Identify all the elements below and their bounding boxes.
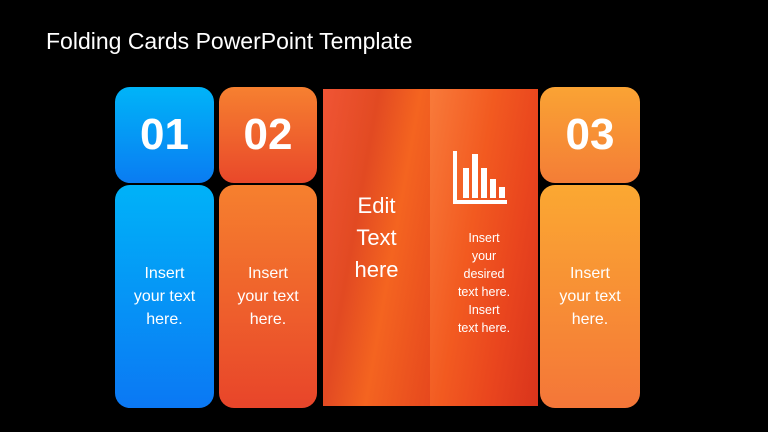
card 01 body: here. xyxy=(146,311,183,328)
text block: desired xyxy=(464,267,504,281)
icon: bar chart xyxy=(453,151,507,204)
card 02 body: your text xyxy=(237,288,299,305)
text block: Insert xyxy=(468,303,500,317)
text block: Insert xyxy=(468,231,500,245)
text block: text here. xyxy=(458,285,510,299)
card 03 top: 03 xyxy=(566,110,614,159)
folded panel left: here xyxy=(354,256,399,282)
card 01 top: 01 xyxy=(140,110,189,159)
card 03 top xyxy=(540,87,640,183)
card 01 body: your text xyxy=(134,288,195,305)
card 03 body: here. xyxy=(572,311,608,328)
card 03 body: your text xyxy=(559,288,621,305)
text block: your xyxy=(472,249,496,263)
text block xyxy=(458,231,510,335)
folded panel left: Edit xyxy=(358,192,395,218)
card 02 top xyxy=(219,87,317,183)
text block: text here. xyxy=(458,321,510,335)
card 02 body xyxy=(219,185,317,408)
folded panel left xyxy=(323,89,430,406)
card 02 top: 02 xyxy=(244,110,292,159)
card 01 body xyxy=(115,185,214,408)
folded panel right xyxy=(430,89,538,406)
card 02 body: here. xyxy=(250,311,286,328)
folded panel left: Text xyxy=(356,224,397,250)
card 01 top xyxy=(115,87,214,183)
title: Folding Cards PowerPoint Template xyxy=(46,28,412,54)
card 02 body: Insert xyxy=(248,265,288,282)
card 03 body xyxy=(540,185,640,408)
card 03 body: Insert xyxy=(570,265,610,282)
card 01 body: Insert xyxy=(144,265,184,282)
